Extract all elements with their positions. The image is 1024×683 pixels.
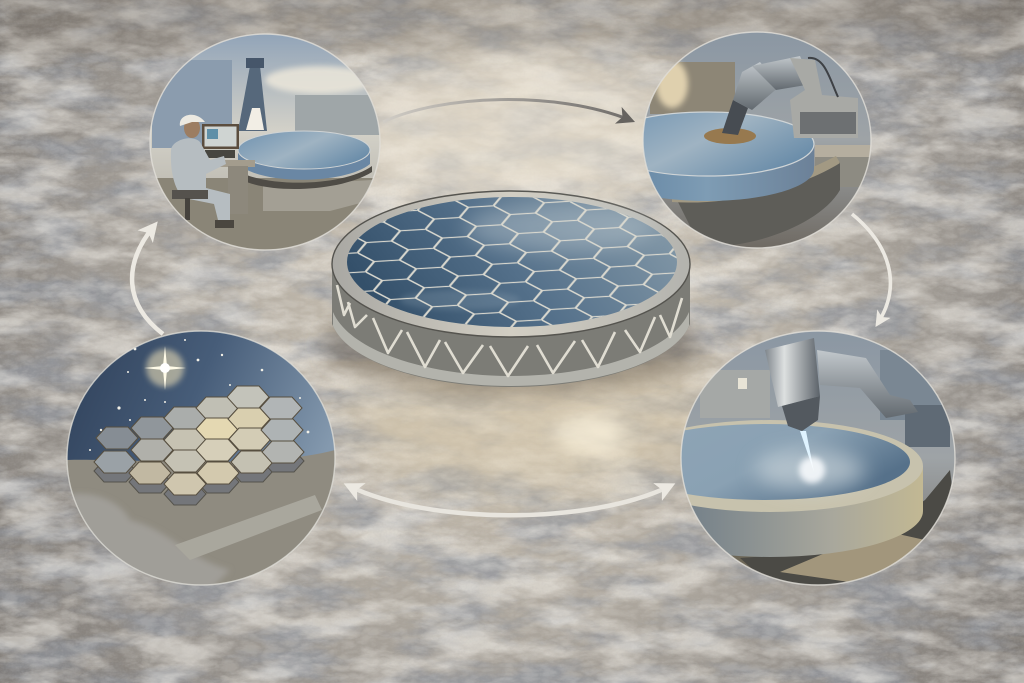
ground and clouds — [67, 450, 335, 585]
icon: star — [144, 346, 186, 390]
panel: robotic polishing — [642, 31, 872, 249]
panel: operator inspecting mirror — [150, 34, 380, 250]
laser head — [765, 338, 918, 483]
panel: laser figuring — [680, 330, 956, 586]
desk and monitor — [202, 124, 255, 182]
mirror shadow — [321, 295, 701, 395]
central segmented mirror — [321, 191, 701, 395]
base ring — [672, 162, 840, 246]
polished disc — [643, 111, 814, 201]
truss — [337, 285, 682, 376]
arrow: segments back to inspection — [132, 226, 163, 334]
arrow: double-headed between laser figuring and segment assembly — [349, 486, 670, 515]
hexagon tile cluster — [94, 386, 304, 505]
arrow: polishing to laser figuring — [852, 214, 890, 323]
hexagonal segments — [347, 197, 677, 327]
mirror top plate — [332, 191, 690, 337]
windows wall — [650, 62, 735, 114]
building left — [152, 60, 232, 148]
worker figure — [171, 115, 234, 228]
arrow: inspection to polishing — [383, 100, 630, 122]
floor — [732, 556, 756, 568]
glass surface — [347, 197, 677, 327]
tile thickness — [94, 456, 304, 506]
robot arm — [722, 56, 858, 138]
icon: tower — [238, 58, 267, 131]
transport case — [175, 495, 322, 560]
side table — [815, 145, 871, 157]
star field — [89, 339, 309, 451]
panel: hexagonal segments in space — [67, 331, 335, 590]
large disc under laser — [682, 420, 923, 557]
ground — [150, 178, 380, 250]
small mirror disc — [238, 131, 372, 211]
mirror side band — [332, 266, 690, 387]
workshop wall — [700, 370, 770, 418]
tile tops — [94, 386, 304, 495]
